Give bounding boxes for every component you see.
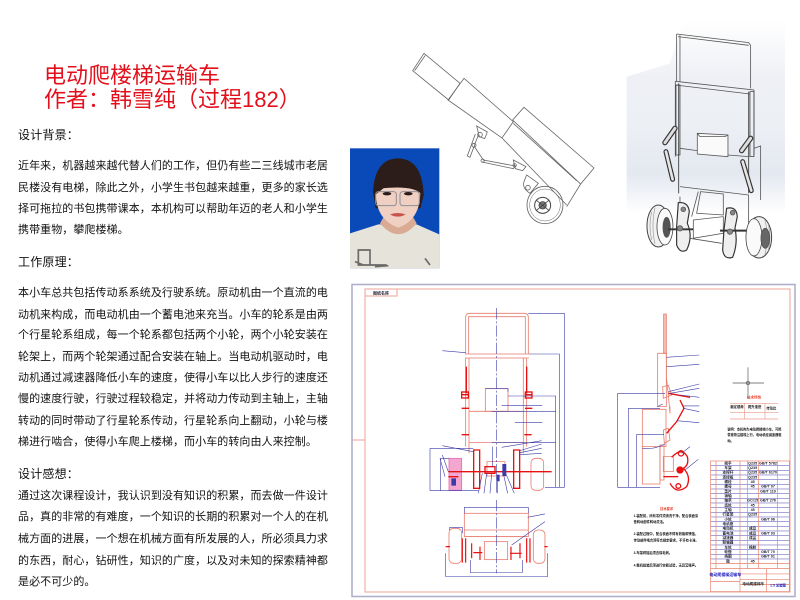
- text: technical requirements: [634, 506, 699, 567]
- text block: working principle: 轮架上，而两个轮架通过配合安装在轴上。当电动机驱动时，电: [18, 351, 328, 363]
- heading: surface table: 技术特性: [747, 394, 762, 400]
- right wheel: [746, 217, 772, 258]
- photo: author portrait: [350, 148, 439, 268]
- parts list table: 主轴: [724, 507, 732, 512]
- parts list table: 键: [726, 558, 730, 563]
- parts list table: 45: [751, 480, 755, 484]
- parts list table: 成品: [749, 526, 757, 531]
- parts list table: 连接板: [722, 474, 734, 479]
- drawing name: 电动爬楼梯车: [742, 581, 765, 586]
- text block: design reflections: 械方面的进展，一个想在机械方面有所发展的人，所必须具力求: [18, 533, 328, 545]
- parts list table: 把手: [724, 460, 732, 465]
- parts list table: GB/T 6170: [759, 471, 777, 475]
- parts list table: 轴承: [724, 498, 732, 503]
- text: drawing note: [727, 426, 782, 443]
- parts list table: 小轮: [724, 516, 732, 521]
- text: technical requirements: 3.车架焊接后须去除毛刺。: [634, 550, 672, 555]
- small table: specification: 额定载荷: [730, 404, 744, 409]
- illustration: side view of trolley: [413, 53, 594, 224]
- drawing number: 1:5 总装图: [770, 583, 787, 588]
- text: technical requirements: 1.装配前，所有零件须清洗干净，配合表面涂: [634, 513, 699, 518]
- parts list table: 螺栓: [724, 479, 732, 484]
- parts list table: 联轴器: [722, 540, 734, 545]
- parts list table: Q235: [748, 513, 757, 517]
- text: drawing note: 动。: [727, 438, 734, 443]
- text block: design reflections: [18, 490, 328, 588]
- parts list table: 车架: [724, 465, 732, 470]
- parts list table: 45: [751, 485, 755, 489]
- parts list table: 45: [751, 559, 755, 563]
- sheet inner frame: [352, 289, 790, 592]
- drawing: plan view: [446, 500, 548, 577]
- parts list table: 成品: [749, 535, 757, 540]
- text block: design background: 民楼没有电梯，除此之外，小学生书包越来越重，更多的家长选: [18, 182, 328, 194]
- parts list table: Q235: [748, 466, 757, 470]
- illustration: front view of trolley: [647, 34, 772, 258]
- parts list table: 减速器: [722, 535, 734, 540]
- small table: specification: 爬升速度: [748, 404, 762, 409]
- drawing: projection symbol: [733, 367, 764, 398]
- text block: design reflections: 品，真的非常的有难度，一个知识的长期的积累对一个人的在机: [18, 511, 328, 523]
- parts list table: GB/T 119: [760, 489, 776, 493]
- text block: design reflections: 的东西，耐心，钻研性，知识的广度，以及对未知的探索精神都: [18, 555, 328, 567]
- text: technical requirements: 技术要求: [660, 506, 674, 511]
- title block label: 电动爬楼梯运输车: [709, 571, 741, 577]
- parts list table: 蓄电池: [722, 530, 734, 535]
- parts list table: 轮毂: [724, 549, 732, 554]
- text block: working principle: 梯进行啮合，使得小车爬上楼梯，而小车的转向由人来控制。: [18, 436, 317, 448]
- illustration: front view background shading: [627, 20, 785, 213]
- parts list table: GB/T 276: [760, 499, 776, 503]
- parts list table: GCr15: [747, 499, 758, 503]
- parts list table: GB/T 5782: [759, 461, 777, 465]
- left wheel: [647, 205, 673, 247]
- parts list table: 垫片: [724, 488, 732, 493]
- parts list table: 电机座: [722, 521, 734, 526]
- parts list table: Q235: [748, 475, 757, 479]
- title: 电动爬楼梯运输车: [44, 63, 220, 88]
- text block: design background: [18, 160, 328, 236]
- parts list table: [709, 460, 789, 592]
- parts list table: Q235: [748, 461, 757, 465]
- panel: engineering drawing sheet: [352, 284, 795, 596]
- text block: design background: 近年来，机器越来越代替人们的工作，但仍有些二三线城市老居: [18, 160, 328, 172]
- parts list table: 45: [751, 503, 755, 507]
- parts list table: 橡胶: [749, 544, 757, 549]
- text block: working principle: 个行星轮系组成，每一个轮系都包括两个小轮，两个小轮安装在: [18, 329, 328, 341]
- text block: working principle: 本小车总共包括传动系系统及行驶系统。原动机由一个直流的电: [18, 287, 328, 299]
- small table: specification: 传动比: [766, 405, 777, 410]
- parts list table: GB/T 93: [761, 531, 775, 535]
- text block: design reflections: 通过这次课程设计，我认识到没有知识的积累，而去做一件设计: [18, 490, 328, 502]
- parts list table: 挡圈: [724, 554, 732, 559]
- parts list table: 45: [751, 508, 755, 512]
- parts list table: Q235: [748, 471, 757, 475]
- parts list table: 支撑杆: [722, 470, 734, 475]
- parts list table: 成品: [749, 530, 757, 535]
- planetary arm right: [723, 208, 737, 258]
- small table: specification: [730, 403, 778, 419]
- drawing: front elevation: [430, 308, 564, 493]
- heading: design reflections: 设计感想：: [18, 467, 79, 481]
- text: technical requirements: 2.装配过程中，配合表面不得有划痕和锈蚀，: [634, 531, 698, 536]
- text block: working principle: [18, 286, 328, 448]
- parts list table: 行星架: [722, 512, 734, 517]
- parts list table: GB/T 96: [761, 517, 775, 521]
- text: drawing note: 带重物沿楼梯上行，电动机经减速器驱: [727, 432, 782, 437]
- title: [44, 63, 301, 112]
- text block: design reflections: 是必不可少的。: [18, 576, 96, 588]
- heading: working principle: 工作原理：: [18, 255, 79, 269]
- parts list table: 销轴: [724, 493, 732, 498]
- text: technical requirements: 传动部件啮合须符合规定要求，不许有卡滞。: [634, 538, 699, 543]
- parts list table: 齿轮: [724, 502, 732, 507]
- text block: working principle: 动机来构成，而电动机由一个蓄电池来充当。小车的轮系是由两: [18, 309, 328, 321]
- drawing: side elevation: [618, 314, 699, 490]
- text block: working principle: 转动的同时带动了行星轮系传动，行星轮系向上翻动，小轮与楼: [18, 415, 328, 427]
- text: technical requirements: 各转动部件转动灵活。: [634, 519, 666, 524]
- stamp label: 图纸名称: [373, 290, 389, 296]
- heading: design background: 设计背景：: [18, 128, 79, 142]
- text block: design background: 携带重物，攀爬楼梯。: [18, 224, 129, 236]
- text block: working principle: 慢的速度行驶，行驶过程较稳定，并将动力传动到主轴上，主轴: [18, 393, 328, 405]
- text block: working principle: 动机通过减速器降低小车的速度，使得小车以比人步行的速度还: [18, 372, 328, 384]
- parts list table: GB/T 97: [761, 485, 775, 489]
- text: technical requirements: 4.整机组装后须进行空载试验，无异常噪声。: [634, 562, 698, 567]
- text: drawing note: 说明：本机构为电动爬楼梯小车，可携: [727, 426, 782, 431]
- parts list table: 电动机: [722, 526, 734, 531]
- parts list table: GB/T 70: [761, 550, 775, 554]
- parts list table: 车轮: [724, 544, 732, 549]
- sheet outer frame: [352, 284, 795, 596]
- planetary arm left: [677, 203, 690, 251]
- parts list table: 螺母: [724, 484, 732, 489]
- text block: design background: 择可拖拉的书包携带课本，本机构可以帮助年迈的老人和小学生: [18, 203, 328, 215]
- parts list table: GB/T 91: [761, 555, 775, 559]
- title: 作者：韩雪纯（过程182）: [44, 86, 301, 112]
